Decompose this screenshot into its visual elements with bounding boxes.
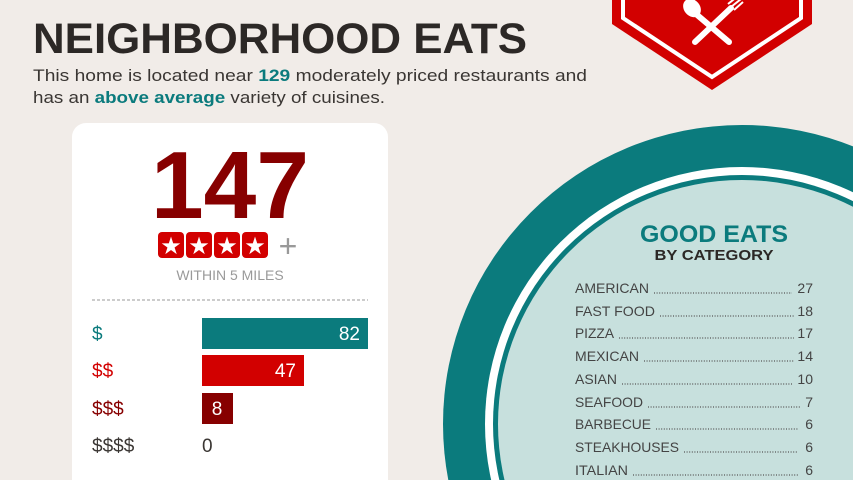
category list: 10 bbox=[797, 371, 813, 387]
bar chart: price levels: 0 bbox=[202, 436, 213, 457]
category list: BARBECUE bbox=[575, 416, 651, 432]
heading: GOOD EATS bbox=[640, 221, 788, 248]
subtitle: has an above average variety of cuisines. bbox=[33, 88, 385, 107]
category list: PIZZA bbox=[575, 325, 615, 341]
category list: FAST FOOD bbox=[575, 303, 655, 319]
category list bbox=[575, 280, 813, 478]
big number: 147 bbox=[151, 132, 309, 239]
category list: 6 bbox=[805, 416, 813, 432]
star rating bbox=[158, 232, 296, 258]
bar chart: price levels: $ bbox=[92, 324, 103, 345]
star rating: ★ bbox=[160, 233, 182, 260]
star rating: + bbox=[279, 228, 297, 264]
caption: WITHIN 5 MILES bbox=[176, 267, 284, 283]
category list: 17 bbox=[797, 325, 813, 341]
subtitle bbox=[33, 66, 587, 107]
icon: spoon and fork bbox=[679, 0, 743, 42]
bar chart: price levels: $$$$ bbox=[92, 436, 135, 457]
star rating: ★ bbox=[216, 233, 238, 260]
category list: ASIAN bbox=[575, 371, 617, 387]
category list: SEAFOOD bbox=[575, 394, 643, 410]
panel: good eats by category plate: BY CATEGORY bbox=[654, 247, 774, 264]
category list: 6 bbox=[805, 462, 813, 478]
category list: MEXICAN bbox=[575, 348, 639, 364]
badge: restaurant icon bbox=[612, 0, 812, 90]
star rating: ★ bbox=[244, 233, 266, 260]
category list: 6 bbox=[805, 439, 813, 455]
category list: ITALIAN bbox=[575, 462, 628, 478]
category list: STEAKHOUSES bbox=[575, 439, 679, 455]
bar chart: price levels: $$ bbox=[92, 361, 114, 382]
star rating: ★ bbox=[188, 233, 210, 260]
category list: 7 bbox=[805, 394, 813, 410]
panel: good eats by category plate bbox=[443, 125, 853, 480]
bar chart: price levels: 8 bbox=[212, 399, 222, 420]
title: NEIGHBORHOOD EATS bbox=[33, 15, 527, 63]
category list: 27 bbox=[797, 280, 813, 296]
category list: 14 bbox=[797, 348, 813, 364]
bar chart: price levels: 47 bbox=[275, 361, 296, 382]
bar chart: price levels: 82 bbox=[339, 324, 360, 345]
category list: AMERICAN bbox=[575, 280, 649, 296]
subtitle: This home is located near 129 moderately priced restaurants and bbox=[33, 66, 587, 85]
bar chart: price levels bbox=[92, 318, 368, 457]
category list: 18 bbox=[797, 303, 813, 319]
bar chart: price levels: $$$ bbox=[92, 399, 124, 420]
panel: restaurant count card bbox=[72, 123, 388, 480]
